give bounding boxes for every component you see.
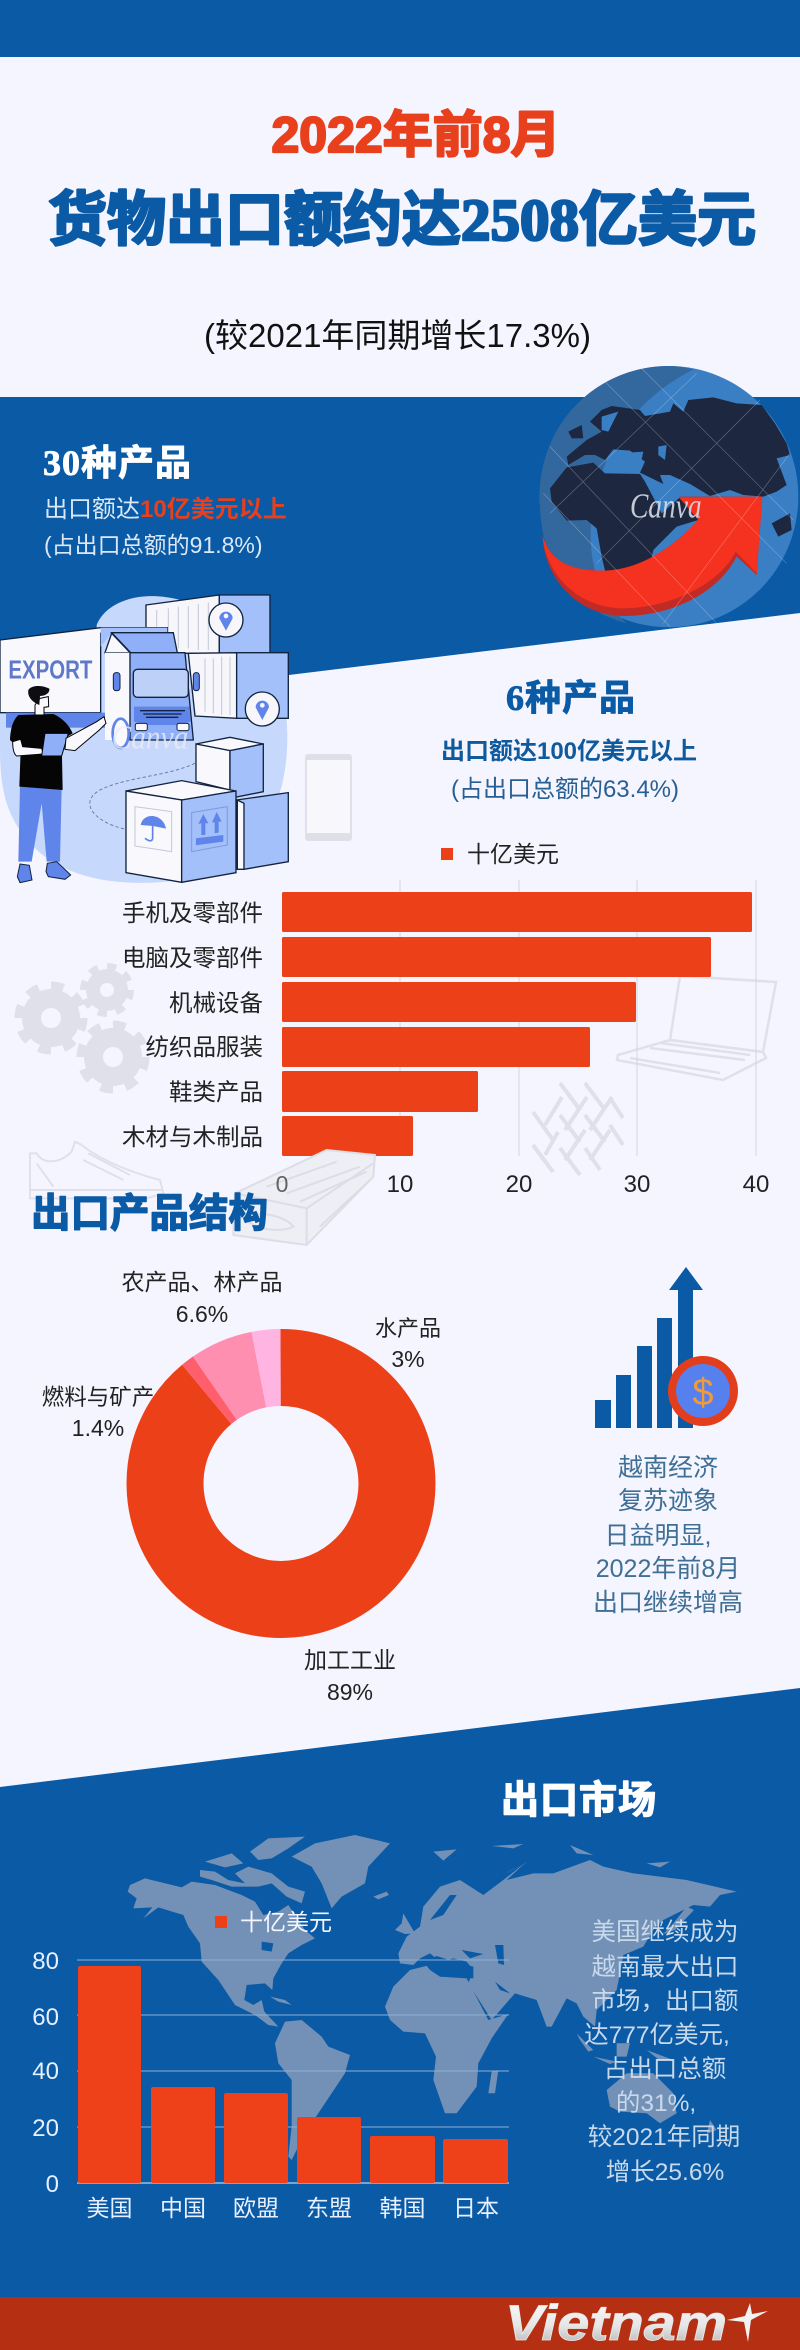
donut labels: 加工工业	[304, 1647, 396, 1673]
text: US market note: 增长25.6%	[606, 2158, 724, 2186]
bar chart: export markets: 0	[46, 2171, 59, 2198]
title	[48, 107, 756, 253]
bar chart: export markets: 欧盟	[233, 2195, 279, 2221]
bar chart: export markets: 60	[32, 2004, 59, 2031]
text: US market note: 市场，出口额	[592, 1987, 738, 2015]
donut labels: 农产品、林产品	[122, 1269, 282, 1295]
donut chart: export structure	[42, 1269, 441, 1705]
blue diagonal panel: 30 products	[0, 397, 800, 710]
heading: export structure: 出口产品结构	[31, 1192, 268, 1236]
bar chart: export markets: 40	[32, 2058, 59, 2085]
watermark text: Canva	[112, 719, 188, 756]
icon: herringbone pattern	[533, 1083, 623, 1175]
text: exports above 10 billion: 出口额达100亿美元以上	[441, 738, 697, 765]
text: US market note: 的31%,	[616, 2089, 696, 2117]
text: US market note: 占出口总额	[604, 2055, 726, 2083]
bar chart: top products: 40	[743, 1171, 769, 1198]
icon: laptop outline	[617, 976, 776, 1080]
illustration: export truck and boxes: EXPORT	[8, 654, 92, 684]
footer band	[0, 2297, 800, 2350]
donut labels	[42, 1269, 441, 1705]
person	[10, 686, 106, 883]
bar chart: export markets: 80	[32, 1948, 59, 1975]
text: recovery note: 出口继续增高	[593, 1589, 743, 1617]
text: US market note: 美国继续成为	[592, 1918, 738, 1946]
bar chart: export markets: 美国	[86, 2195, 132, 2221]
heading: 6 products: 6种产品	[506, 678, 636, 718]
donut labels: 6.6%	[176, 1301, 228, 1327]
text: recovery note	[593, 1454, 743, 1617]
bar chart: top products: 20	[506, 1171, 532, 1198]
bar chart: export markets: 东盟	[306, 2195, 352, 2221]
icon: shoe outline	[30, 1142, 163, 1198]
illustration: export truck and boxes	[0, 595, 288, 883]
icon: gears	[19, 967, 145, 1089]
text: recovery note: 复苏迹象	[618, 1487, 718, 1515]
legend: 十亿美元	[240, 1909, 332, 1935]
axis label: zero: 0	[276, 1171, 288, 1197]
subtitle: (较2021年同期增长17.3%)	[204, 317, 591, 354]
bar chart: top products: 机械设备	[169, 990, 263, 1016]
logo: Vietnam+: Vietnam	[505, 2295, 727, 2350]
text: US market note: 达777亿美元,	[584, 2021, 730, 2049]
bar chart: top products: 电脑及零部件	[122, 945, 263, 971]
bar chart: top products: 木材与木制品	[122, 1124, 263, 1150]
title line 2: 货物出口额约达2508亿美元	[48, 187, 756, 253]
icon: wood log	[233, 1150, 375, 1245]
bar chart: top products: 30	[624, 1171, 650, 1198]
icon: growth chart with coin: $	[692, 1372, 714, 1414]
truck box	[0, 628, 167, 713]
bar chart: top products: 手机及零部件	[122, 900, 263, 926]
bar chart: export markets: 日本	[453, 2195, 499, 2221]
donut labels: 水产品	[375, 1316, 441, 1341]
text: recovery note: 2022年前8月	[596, 1555, 740, 1583]
heading: export markets: 出口市场	[501, 1780, 657, 1822]
top band	[0, 0, 800, 57]
text: US market note	[584, 1918, 740, 2186]
bar chart: top products: 鞋类产品	[169, 1079, 263, 1105]
text: exports above 1 billion: 出口额达10亿美元以上	[44, 496, 287, 523]
blue diagonal panel: export markets	[0, 1688, 800, 2350]
bar chart: export markets: 20	[32, 2115, 59, 2142]
icon: phone outline	[306, 755, 351, 840]
bar chart: top products: 纺织品服装	[146, 1034, 263, 1060]
text: recovery note: 日益明显,	[605, 1522, 711, 1550]
donut labels: 89%	[327, 1679, 373, 1705]
bar chart: top products	[122, 841, 769, 1198]
bar chart: export markets	[32, 1909, 509, 2221]
legend: 十亿美元	[467, 841, 559, 867]
world map	[128, 1835, 737, 2160]
watermark text: Canva	[630, 486, 702, 525]
bar chart: export markets: 中国	[160, 2195, 206, 2221]
text: share 63.4%: (占出口总额的63.4%)	[451, 776, 679, 803]
donut labels: 1.4%	[72, 1415, 124, 1441]
bar chart: top products: 10	[387, 1171, 413, 1198]
truck cab	[105, 633, 130, 653]
text: US market note: 较2021年同期	[588, 2123, 740, 2151]
back container	[146, 595, 288, 718]
heading: 30 products: 30种产品	[43, 443, 192, 483]
text: US market note: 越南最大出口	[592, 1953, 738, 1981]
text: share 91.8%: (占出口总额的91.8%)	[44, 532, 263, 558]
donut labels: 3%	[391, 1346, 425, 1372]
donut labels: 燃料与矿产	[42, 1385, 154, 1410]
icon: globe with arrow	[540, 366, 798, 627]
boxes	[126, 737, 288, 882]
bar chart: export markets: 韩国	[380, 2195, 426, 2221]
text: recovery note: 越南经济	[618, 1454, 718, 1482]
icon: growth chart with coin	[595, 1267, 738, 1428]
title line 1: 2022年前8月	[271, 107, 561, 163]
